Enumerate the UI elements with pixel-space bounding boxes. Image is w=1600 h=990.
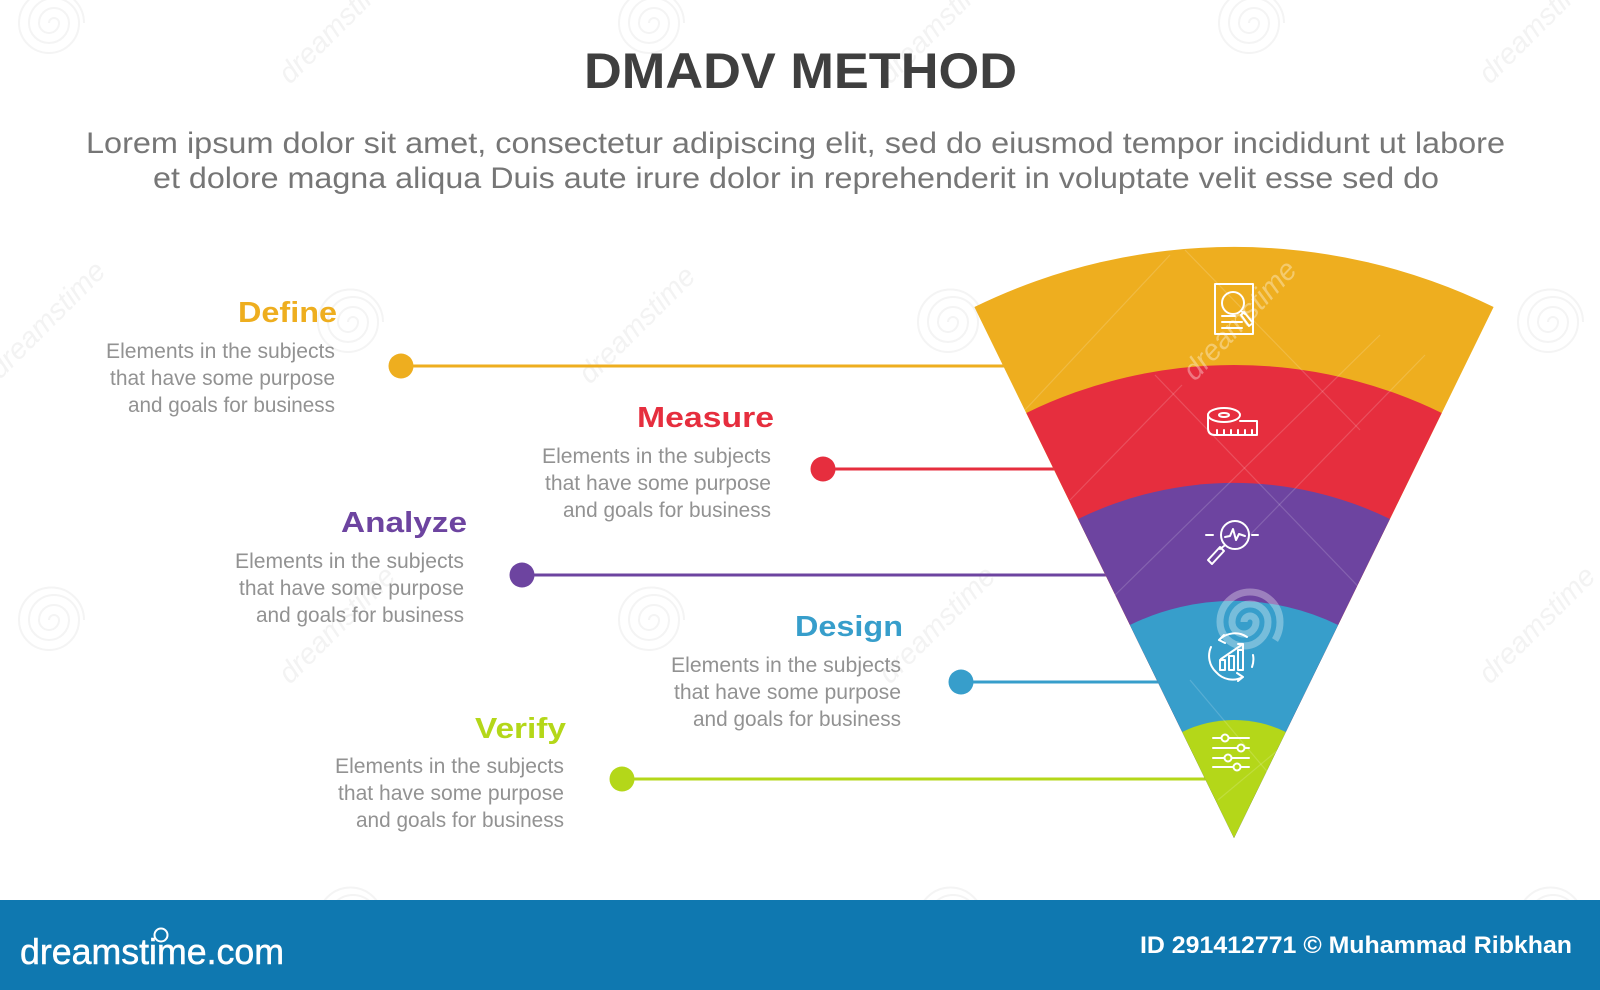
block: measure [542, 402, 774, 522]
text: dreamstime [872, 560, 1002, 690]
connector: measure [810, 456, 1060, 482]
description: measure: that have some purpose [545, 471, 771, 495]
connector: design [948, 670, 1165, 694]
watermark text: dreamstime [1177, 254, 1303, 387]
description: design: and goals for business [693, 707, 901, 731]
heading: measure: Measure [637, 402, 774, 434]
description: design: Elements in the subjects [671, 653, 901, 677]
description: verify: and goals for business [356, 808, 564, 832]
segment: analyze [1078, 483, 1390, 838]
footer bar [0, 900, 1600, 990]
icon: measuring tape [1208, 408, 1257, 435]
description: design [671, 653, 901, 731]
heading: define: Define [238, 297, 337, 329]
description: define [106, 339, 335, 417]
heading: analyze: Analyze [341, 507, 467, 539]
heading: design: Design [795, 611, 903, 643]
description: analyze: Elements in the subjects [235, 549, 464, 573]
icon: analysis magnifier [1206, 521, 1258, 564]
watermark spiral [1220, 592, 1280, 646]
connector: define [388, 354, 1010, 378]
title: DMADV METHOD [584, 43, 1017, 99]
block: analyze [235, 507, 467, 627]
segment: measure [1026, 365, 1442, 838]
text: dreamstime [1472, 560, 1600, 690]
description: verify: Elements in the subjects [335, 754, 564, 778]
subtitle text [86, 127, 1505, 195]
description: design: that have some purpose [674, 680, 901, 704]
description: verify: that have some purpose [338, 781, 564, 805]
description: define: and goals for business [128, 393, 335, 417]
icon: document search [1215, 284, 1253, 334]
description: measure: and goals for business [563, 498, 771, 522]
description: analyze: that have some purpose [239, 576, 464, 600]
connector: verify [610, 766, 1212, 792]
segment: design [1130, 601, 1338, 838]
footer credit: ID 291412771 © Muhammad Ribkhan [1140, 932, 1572, 959]
segment: verify [1182, 720, 1286, 838]
icon: growth chart cycle [1209, 633, 1253, 681]
description: define: Elements in the subjects [106, 339, 335, 363]
segment: define [974, 247, 1494, 838]
icon: logo spiral [154, 928, 168, 942]
block: design [671, 611, 903, 731]
block: verify [335, 713, 566, 832]
subtitle text: Lorem ipsum dolor sit amet, consectetur adipiscing elit, sed do eiusmod tempor incididunt ut labore [86, 127, 1505, 160]
text: dreamstime [272, 560, 402, 690]
block: define [106, 297, 337, 417]
description: analyze [235, 549, 464, 627]
text: dreamstime [572, 260, 702, 390]
description: analyze: and goals for business [256, 603, 464, 627]
connector: analyze [510, 562, 1110, 588]
heading: verify: Verify [475, 713, 566, 745]
funnel chart [974, 247, 1494, 838]
description: define: that have some purpose [110, 366, 335, 390]
icon: sliders [1213, 734, 1249, 770]
description: verify [335, 754, 564, 832]
footer logo: dreamstime.com [20, 931, 284, 972]
description: measure [542, 444, 771, 522]
subtitle text: et dolore magna aliqua Duis aute irure dolor in reprehenderit in voluptate velit esse sed do [153, 162, 1439, 195]
description: measure: Elements in the subjects [542, 444, 771, 468]
